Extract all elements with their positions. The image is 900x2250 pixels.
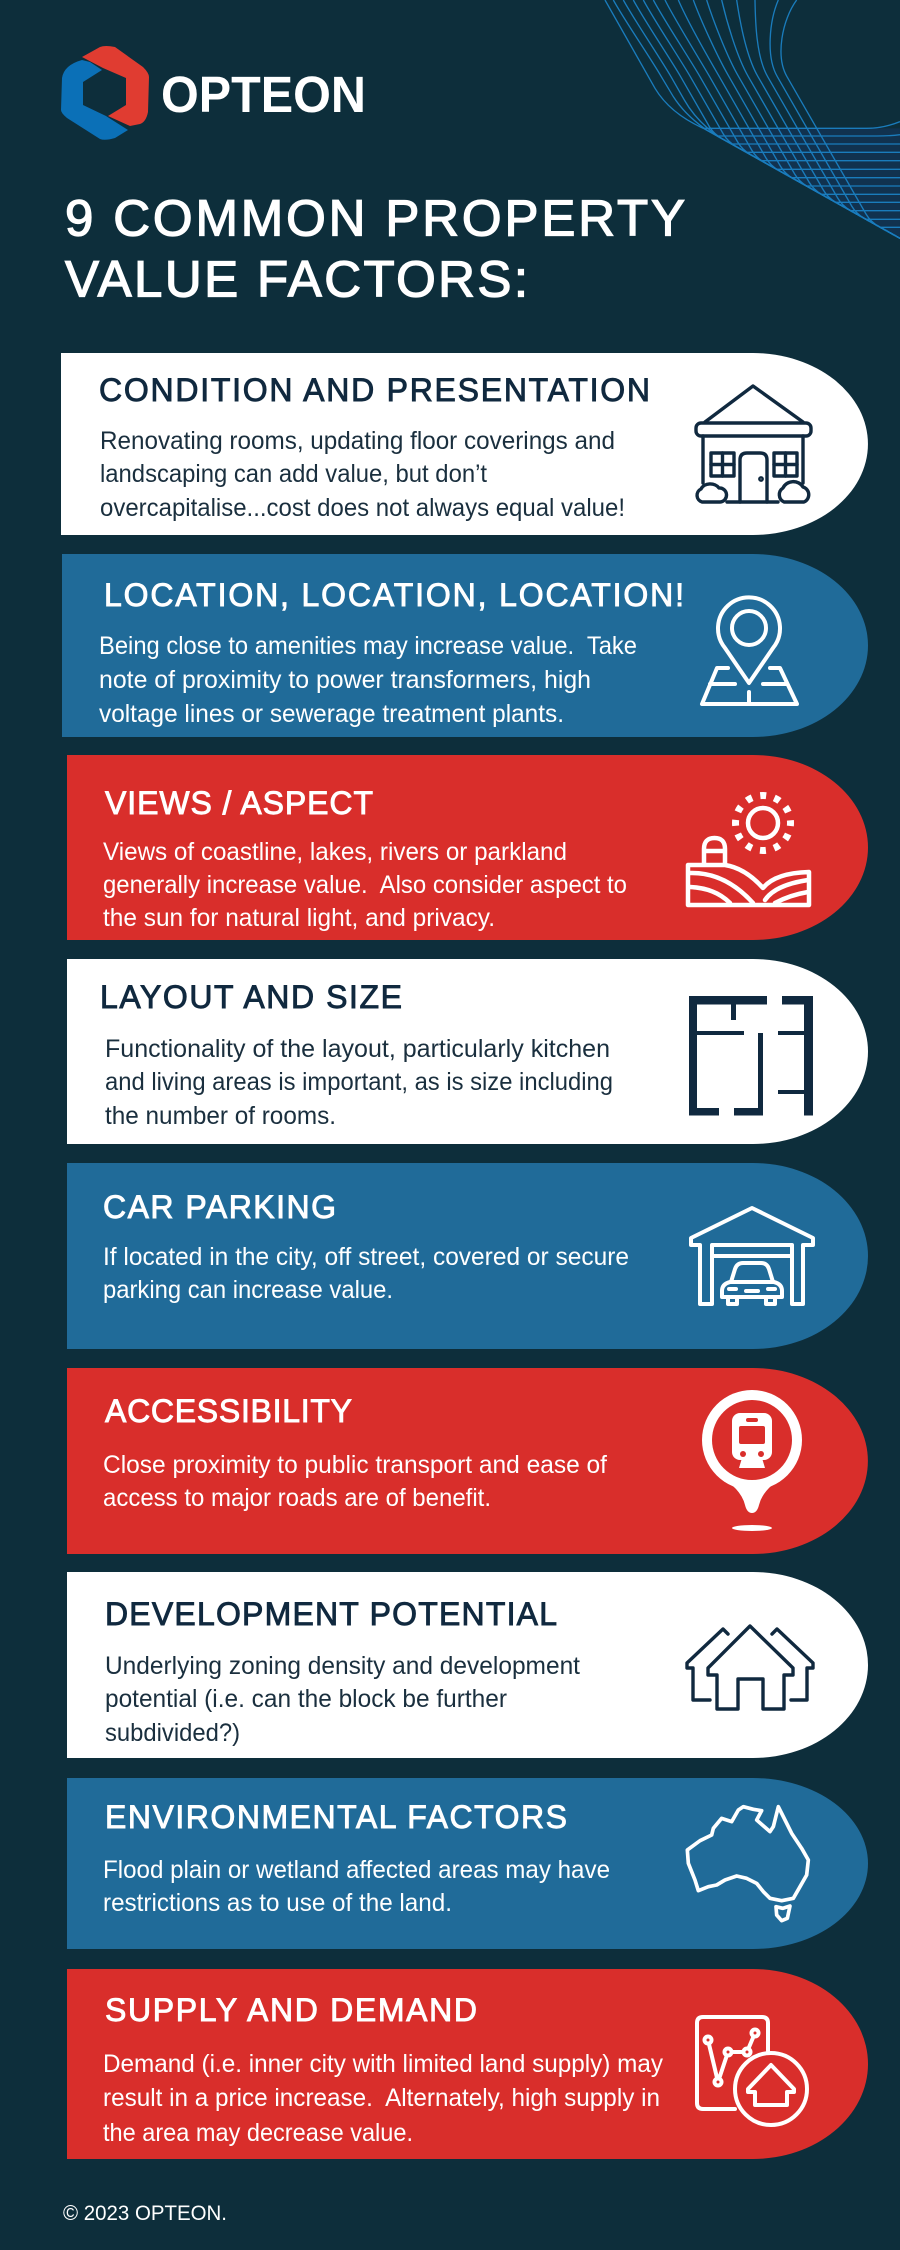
body text: If located in the city, off street, covered or secure	[103, 1243, 629, 1271]
body text: Flood plain or wetland affected areas may have	[103, 1856, 610, 1884]
body text: parking can increase value.	[103, 1276, 393, 1304]
body text: voltage lines or sewerage treatment plants.	[99, 700, 564, 728]
panel: environmental factors	[67, 1778, 868, 1949]
icon: chart and house	[697, 2017, 807, 2125]
title	[65, 190, 685, 308]
panel: condition and presentation	[61, 353, 868, 535]
title: VALUE FACTORS:	[65, 250, 528, 308]
heading: CONDITION AND PRESENTATION	[99, 372, 650, 408]
body text: the sun for natural light, and privacy.	[103, 904, 495, 932]
body text: and living areas is important, as is size including	[105, 1068, 613, 1096]
decorative wave lines	[605, 0, 900, 238]
icon: house	[696, 386, 811, 502]
logo wordmark: OPTEON	[161, 66, 366, 123]
heading: CAR PARKING	[103, 1189, 336, 1225]
heading: SUPPLY AND DEMAND	[105, 1992, 477, 2028]
body text: result in a price increase. Alternately, high supply in	[103, 2084, 660, 2112]
heading: LOCATION, LOCATION, LOCATION!	[104, 577, 684, 613]
body text	[105, 1652, 580, 1747]
panel: accessibility	[67, 1368, 868, 1554]
body text: the number of rooms.	[105, 1102, 336, 1130]
panel: development potential	[67, 1572, 868, 1758]
body text: generally increase value. Also consider aspect to	[103, 871, 627, 899]
icon: train location pin	[702, 1390, 802, 1531]
body text: Being close to amenities may increase value. Take	[99, 632, 637, 660]
body text: access to major roads are of benefit.	[103, 1484, 491, 1512]
heading: DEVELOPMENT POTENTIAL	[105, 1596, 557, 1632]
panel: layout and size	[67, 959, 868, 1144]
body text	[103, 1243, 629, 1304]
heading: LAYOUT AND SIZE	[100, 979, 402, 1015]
panel: views and aspect	[67, 755, 868, 940]
body text	[103, 1451, 607, 1512]
footer copyright: © 2023 OPTEON.	[63, 2202, 227, 2225]
icon: floor plan	[689, 996, 813, 1116]
icon: sun and farm	[688, 796, 809, 905]
logo mark: blue segment	[61, 60, 128, 140]
icon: garage with car	[691, 1208, 813, 1304]
panel: location	[62, 554, 868, 737]
icon: map pin	[702, 597, 797, 704]
logo mark: red segment	[82, 46, 149, 126]
body text	[103, 2050, 663, 2147]
body text: landscaping can add value, but don’t	[100, 460, 487, 488]
panel: car parking	[67, 1163, 868, 1349]
title: 9 COMMON PROPERTY	[65, 190, 685, 246]
logo: Opteon	[61, 46, 366, 140]
body text: Renovating rooms, updating floor coverings and	[100, 427, 615, 455]
body text	[105, 1035, 613, 1130]
body text: potential (i.e. can the block be further	[105, 1685, 507, 1713]
icon: houses	[687, 1626, 813, 1709]
heading: VIEWS / ASPECT	[105, 785, 373, 821]
body text: the area may decrease value.	[103, 2119, 413, 2147]
body text: Functionality of the layout, particularly kitchen	[105, 1035, 610, 1063]
panel: supply and demand	[67, 1969, 868, 2159]
heading: ENVIRONMENTAL FACTORS	[105, 1799, 567, 1835]
body text	[103, 838, 627, 932]
body text: Close proximity to public transport and ease of	[103, 1451, 607, 1479]
body text	[100, 427, 625, 522]
body text: Underlying zoning density and development	[105, 1652, 580, 1680]
body text: overcapitalise...cost does not always equal value!	[100, 494, 625, 522]
icon: map of Australia	[687, 1807, 808, 1921]
body text	[103, 1856, 610, 1917]
body text: Demand (i.e. inner city with limited land supply) may	[103, 2050, 663, 2078]
heading: ACCESSIBILITY	[105, 1393, 352, 1429]
body text: note of proximity to power transformers, high	[99, 666, 591, 694]
body text: subdivided?)	[105, 1719, 240, 1747]
body text: restrictions as to use of the land.	[103, 1889, 452, 1917]
body text: Views of coastline, lakes, rivers or parkland	[103, 838, 567, 866]
body text	[99, 632, 637, 728]
